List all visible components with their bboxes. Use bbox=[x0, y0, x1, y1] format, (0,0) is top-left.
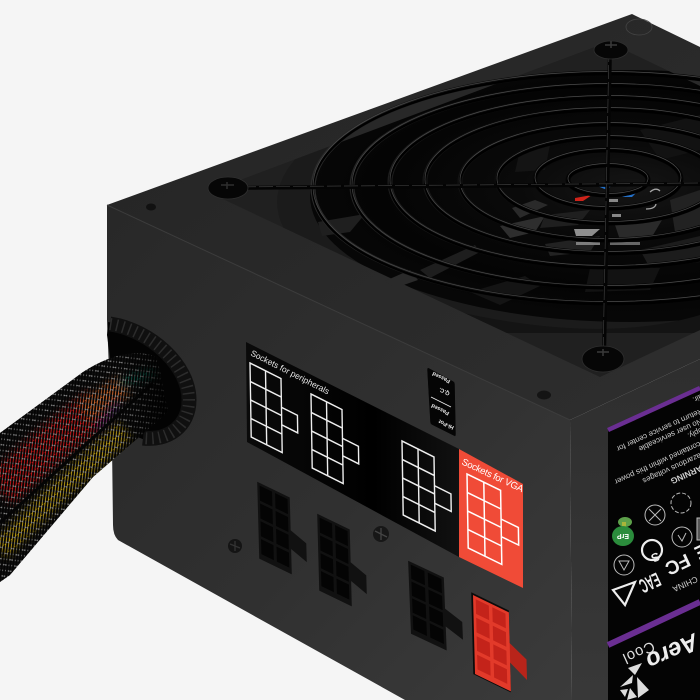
fan grill dark core bbox=[313, 74, 700, 304]
panel: top face bbox=[107, 14, 700, 420]
label text: sockets for peripherals: Sockets for peripherals bbox=[249, 348, 331, 396]
panel: side face bbox=[107, 204, 572, 700]
fan grill highlights bbox=[313, 72, 700, 302]
top corner sticker bbox=[626, 19, 652, 35]
fan hub stickers bbox=[575, 185, 660, 209]
panel: end face bbox=[570, 359, 700, 700]
fan mounting plate bbox=[208, 42, 700, 377]
label text: sockets for VGA: Sockets for VGA bbox=[460, 457, 526, 495]
screw: corner top-left bbox=[146, 204, 156, 210]
braided cable bbox=[0, 353, 168, 582]
cable grommet bbox=[107, 322, 190, 440]
fan grill spokes bbox=[225, 48, 700, 358]
connector 1 bbox=[257, 482, 307, 582]
screw: side middle bbox=[373, 526, 389, 542]
connector 2 bbox=[317, 514, 367, 614]
fan grill rings bbox=[313, 73, 700, 303]
screw: corner top-right bbox=[537, 390, 551, 400]
fan opening bbox=[277, 70, 700, 333]
fan blades bbox=[318, 115, 700, 305]
purple stripe: top bbox=[608, 388, 700, 430]
icon: EuP green badge: ErP bbox=[617, 532, 629, 539]
QC label: Q.C. bbox=[438, 386, 451, 396]
mark: S: S bbox=[649, 549, 662, 565]
warning text: contained within this power bbox=[613, 440, 700, 487]
Hi-Pot label: Hi-Pot bbox=[438, 418, 455, 430]
logo mark bbox=[620, 663, 649, 700]
QC passed text: Passed bbox=[432, 370, 452, 384]
grill screw: bottom bbox=[582, 346, 624, 372]
Hi-Pot passed text: Passed bbox=[431, 402, 451, 416]
socket outline VGA bbox=[467, 474, 519, 573]
socket outline 2 bbox=[311, 394, 359, 492]
screw: side left bbox=[228, 539, 242, 553]
mark: EAC: EAC bbox=[635, 568, 664, 597]
connector 4: VGA red bbox=[471, 592, 528, 700]
icon: EuP green badge bbox=[612, 517, 634, 546]
grill screw: left bbox=[208, 177, 248, 199]
origin text: CHINA bbox=[671, 574, 699, 594]
logo: Cool: Cool bbox=[619, 637, 657, 667]
mark: FC: FC bbox=[661, 549, 693, 579]
sticker: sockets for VGA bbox=[459, 449, 526, 588]
warning text bbox=[613, 387, 700, 487]
cable crease bbox=[0, 383, 153, 523]
socket outline 1 bbox=[250, 363, 298, 461]
cable wire colours bbox=[0, 372, 155, 550]
end-face label bbox=[608, 387, 700, 700]
cable braid bbox=[0, 353, 168, 582]
side face top edge bbox=[107, 205, 570, 420]
sticker: QC and Hi-Pot bbox=[427, 368, 456, 436]
connector 3 bbox=[408, 561, 464, 658]
grill screw: top bbox=[594, 41, 628, 59]
sticker: sockets for peripherals bbox=[246, 342, 459, 557]
purple stripe: bottom bbox=[608, 602, 700, 645]
cable shadow into grommet bbox=[0, 353, 168, 582]
certification icons bbox=[613, 493, 700, 605]
socket outline 3 bbox=[402, 441, 452, 539]
divider bbox=[431, 397, 451, 407]
